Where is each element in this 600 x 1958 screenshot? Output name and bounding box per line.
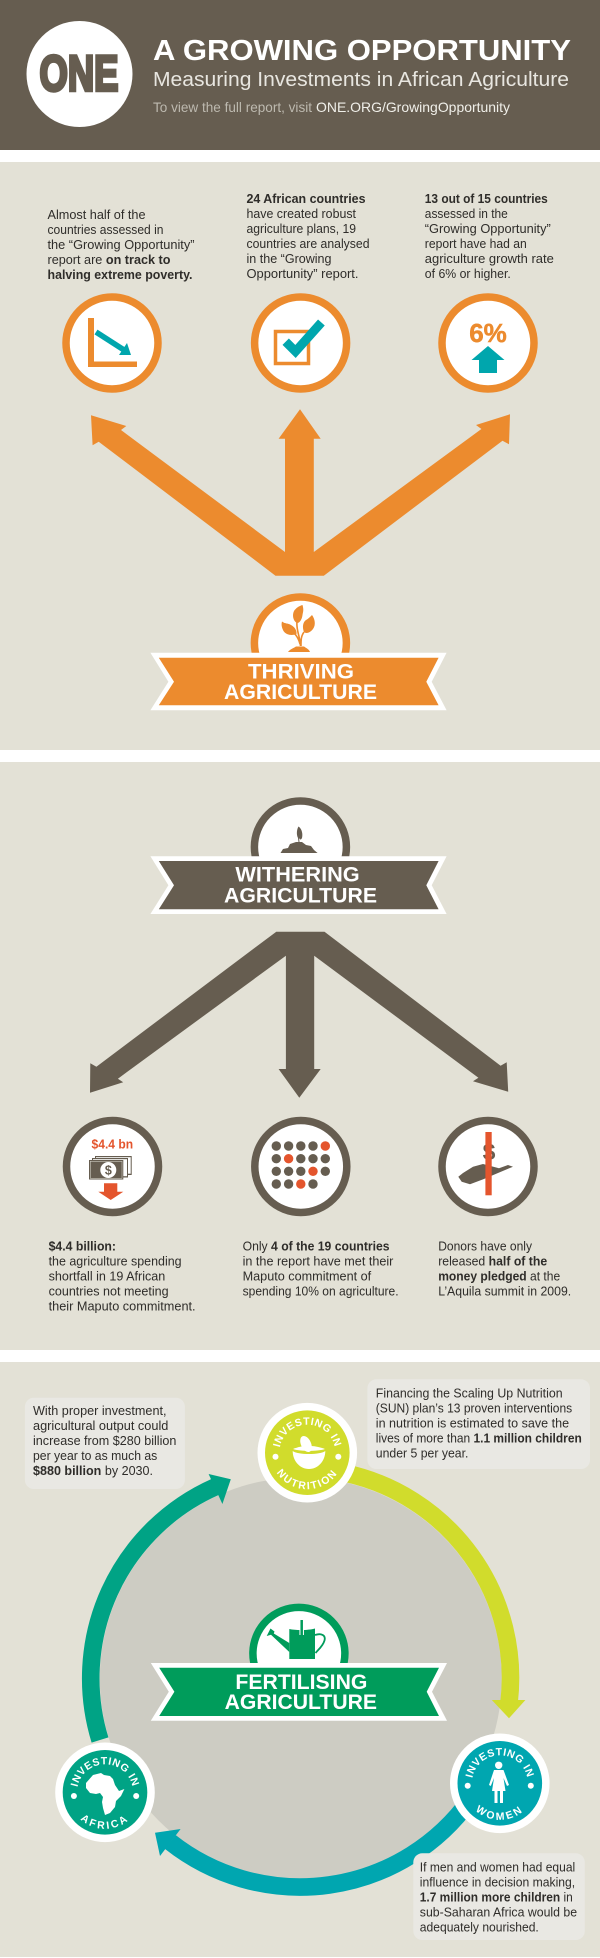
icon: woman bbox=[489, 1762, 509, 1803]
report link: To view the full report, visit bbox=[153, 99, 312, 115]
stat text: L'Aquila pledge: money pledged at the bbox=[438, 1269, 560, 1283]
banner heading bbox=[225, 1671, 377, 1714]
callout: scaling up nutrition: (SUN) plan’s 13 proven interventions bbox=[376, 1402, 572, 1416]
stat text: extreme poverty: report are on track to bbox=[48, 253, 171, 267]
stat text: extreme poverty bbox=[48, 208, 194, 282]
ONE logo bbox=[26, 21, 132, 127]
callout: scaling up nutrition bbox=[367, 1379, 590, 1469]
icon: hand and dollar with bar bbox=[442, 1120, 534, 1212]
badge: investing in women bbox=[450, 1734, 550, 1834]
arrow: nutrition to women bbox=[345, 1473, 525, 1718]
stat text: spending shortfall bbox=[49, 1239, 196, 1313]
report link bbox=[153, 99, 510, 115]
stat text: spending shortfall: their Maputo commitment. bbox=[49, 1299, 196, 1313]
title: A GROWING OPPORTUNITY bbox=[153, 35, 571, 67]
stat text: spending shortfall: the agriculture spending bbox=[49, 1254, 182, 1268]
stat text: growth rate bbox=[425, 192, 554, 281]
callout: agricultural output: agricultural output could bbox=[33, 1419, 168, 1433]
arrows: thriving outward bbox=[91, 409, 510, 576]
central grey disc bbox=[100, 1478, 502, 1880]
banner heading: THRIVING bbox=[248, 660, 354, 684]
panel: thriving agriculture bbox=[0, 162, 600, 750]
icon: checked box bbox=[255, 297, 347, 389]
stat text: agriculture plans: agriculture plans, 19 bbox=[246, 222, 356, 236]
icon: hand and dollar with bar: $ bbox=[483, 1139, 496, 1165]
stat text: extreme poverty: halving extreme poverty. bbox=[48, 268, 192, 282]
arrow: africa to nutrition bbox=[91, 1474, 231, 1740]
callout: scaling up nutrition: in nutrition is estimated to save the bbox=[376, 1417, 569, 1431]
stat text: agriculture plans: 24 African countries bbox=[246, 192, 366, 206]
stat text: L'Aquila pledge: Donors have only bbox=[438, 1239, 533, 1253]
stat text: agriculture plans bbox=[246, 192, 370, 281]
stat text: growth rate: assessed in the bbox=[425, 207, 508, 221]
stat text: L'Aquila pledge: L’Aquila summit in 2009. bbox=[438, 1284, 571, 1298]
stat text: agriculture plans: in the “Growing bbox=[246, 252, 332, 266]
stat text: Maputo commitment: Maputo commitment of bbox=[243, 1269, 372, 1283]
banner bbox=[150, 653, 447, 710]
stat text: agriculture plans: countries are analysed bbox=[246, 237, 370, 251]
icon: declining chart bbox=[66, 297, 158, 389]
stat text: growth rate: “Growing Opportunity” bbox=[425, 222, 551, 236]
badge: investing in africa bbox=[55, 1742, 155, 1842]
icon: funding shortfall: $ bbox=[105, 1164, 112, 1178]
stat text: extreme poverty: countries assessed in bbox=[48, 223, 164, 237]
stat text: growth rate: 13 out of 15 countries bbox=[425, 192, 548, 206]
badge: investing in nutrition: INVESTING IN bbox=[272, 1417, 342, 1447]
icon: watering can bbox=[253, 1607, 345, 1699]
callout: scaling up nutrition: under 5 per year. bbox=[376, 1447, 468, 1461]
banner heading: WITHERING bbox=[235, 864, 360, 887]
callout: women decision making: influence in decision making, bbox=[420, 1876, 575, 1890]
banner bbox=[150, 856, 447, 914]
icon: 6% growth bbox=[442, 297, 534, 389]
stat text: spending shortfall: countries not meeting bbox=[49, 1284, 169, 1298]
icon: funding shortfall bbox=[66, 1120, 158, 1212]
stat text: growth rate: of 6% or higher. bbox=[425, 267, 511, 281]
panel: withering agriculture bbox=[0, 762, 600, 1350]
badge: investing in nutrition bbox=[258, 1402, 357, 1502]
callout: women decision making bbox=[413, 1853, 585, 1940]
callout: women decision making: sub-Saharan Africa would be bbox=[420, 1906, 577, 1920]
icon: africa map bbox=[86, 1773, 124, 1815]
banner heading bbox=[224, 660, 377, 704]
badge: withering agriculture bbox=[150, 801, 447, 914]
banner heading: FERTILISING bbox=[235, 1671, 367, 1694]
callout: women decision making: If men and women had equal bbox=[420, 1861, 575, 1875]
subtitle: Measuring Investments in African Agriculture bbox=[153, 69, 569, 91]
badge: investing in women: INVESTING IN bbox=[465, 1748, 534, 1778]
icon: funding shortfall: $4.4 bn bbox=[92, 1136, 133, 1152]
report link: ONE.ORG/GrowingOpportunity bbox=[316, 99, 510, 115]
panel: fertilising agriculture bbox=[0, 1362, 600, 1957]
callout: agricultural output: per year to as much as bbox=[33, 1449, 157, 1463]
callout: women decision making: 1.7 million more children in bbox=[420, 1891, 573, 1905]
stat text: extreme poverty: Almost half of the bbox=[48, 208, 146, 222]
badge: thriving agriculture bbox=[150, 597, 447, 710]
callout: agricultural output: $880 billion by 2030. bbox=[33, 1464, 153, 1478]
ONE logo: ONE bbox=[40, 46, 118, 102]
icon: withered sprout bbox=[254, 801, 346, 893]
arrow: women to africa bbox=[155, 1800, 470, 1887]
stat text: L'Aquila pledge: released half of the bbox=[438, 1254, 547, 1268]
banner bbox=[151, 1663, 447, 1721]
badge: investing in africa: AFRICA bbox=[80, 1815, 128, 1829]
header band bbox=[0, 0, 600, 150]
stat text: Maputo commitment: spending 10% on agriculture. bbox=[243, 1284, 399, 1298]
callout: scaling up nutrition: lives of more than 1.1 million children bbox=[376, 1432, 582, 1446]
stat text: growth rate: agriculture growth rate bbox=[425, 252, 554, 266]
callout: scaling up nutrition: Financing the Scaling Up Nutrition bbox=[376, 1387, 563, 1401]
stat text: Maputo commitment: in the report have met their bbox=[243, 1254, 393, 1268]
banner heading bbox=[224, 864, 377, 908]
stat text: Maputo commitment bbox=[243, 1239, 399, 1298]
icon: healthy plant bbox=[254, 597, 346, 689]
stat text: agriculture plans: have created robust bbox=[246, 207, 357, 221]
stat text: spending shortfall: shortfall in 19 African bbox=[49, 1269, 165, 1283]
icon: 6% growth: 6% bbox=[469, 318, 507, 348]
badge: fertilising agriculture bbox=[151, 1607, 447, 1721]
banner heading: AGRICULTURE bbox=[224, 885, 377, 908]
callout: agricultural output bbox=[25, 1398, 185, 1489]
icon: wheat bowl bbox=[293, 1434, 325, 1469]
banner heading: AGRICULTURE bbox=[224, 681, 377, 704]
stat text: extreme poverty: the “Growing Opportunity” bbox=[48, 238, 194, 252]
stat text: spending shortfall: $4.4 billion: bbox=[49, 1239, 116, 1253]
stat text: L'Aquila pledge bbox=[438, 1239, 571, 1298]
stat text: agriculture plans: Opportunity” report. bbox=[246, 267, 358, 281]
stat text: Maputo commitment: Only 4 of the 19 countries bbox=[243, 1239, 390, 1253]
callout: agricultural output: increase from $280 billion bbox=[33, 1434, 176, 1448]
badge: investing in nutrition: NUTRITION bbox=[276, 1468, 336, 1490]
arrows: withering outward bbox=[90, 932, 508, 1098]
banner heading: AGRICULTURE bbox=[225, 1691, 377, 1714]
icon: dot grid 4 of 19 bbox=[255, 1120, 347, 1212]
callout: women decision making: adequately nourished. bbox=[420, 1921, 539, 1935]
callout: agricultural output: With proper investment, bbox=[33, 1404, 166, 1418]
badge: investing in africa: INVESTING IN bbox=[70, 1757, 140, 1786]
badge: investing in women: WOMEN bbox=[476, 1804, 522, 1820]
stat text: growth rate: report have had an bbox=[425, 237, 527, 251]
